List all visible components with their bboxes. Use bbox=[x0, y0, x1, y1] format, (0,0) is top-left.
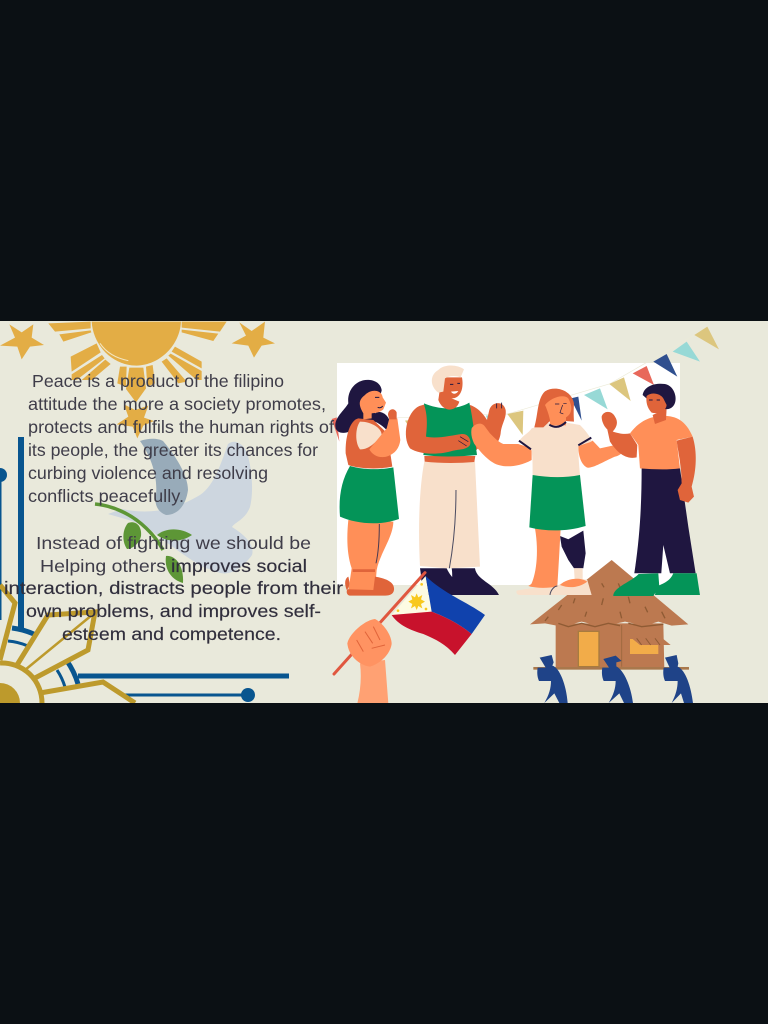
text block: peace paragraph bbox=[28, 371, 334, 506]
illustration: white backdrop bbox=[337, 363, 680, 585]
person: woman with prosthetic leg bbox=[471, 389, 622, 595]
text block: helping others paragraph: Helping others bbox=[40, 556, 166, 576]
illustration: hut carried by men bbox=[530, 560, 693, 703]
icon: gold sun outline bbox=[0, 585, 135, 723]
illustration: fist holding Philippine flag bbox=[334, 573, 485, 703]
bottom letterbox band bbox=[0, 703, 768, 1024]
text block: helping others paragraph: improves social bbox=[171, 556, 307, 576]
text block: helping others paragraph bbox=[4, 533, 343, 644]
text block: peace paragraph: curbing violence and resolving bbox=[28, 463, 268, 483]
icon: sun with stars bbox=[0, 322, 275, 438]
text block: helping others paragraph: own problems, and improves self- bbox=[26, 601, 321, 621]
person: man in green top bbox=[406, 366, 506, 595]
text block: helping others paragraph: Instead of fighting we should be bbox=[36, 533, 311, 553]
text block: helping others paragraph: esteem and competence. bbox=[62, 624, 281, 644]
text block: peace paragraph: conflicts peacefully. bbox=[28, 486, 184, 506]
men carrying bbox=[537, 655, 693, 703]
window bbox=[630, 638, 671, 654]
illustration: bunting bbox=[332, 327, 719, 442]
blue circuit lines bbox=[0, 437, 289, 702]
background panel bbox=[0, 321, 768, 703]
person: woman with dark hair bbox=[335, 380, 400, 596]
icon: dove with olive branch bbox=[95, 439, 253, 583]
text block: helping others paragraph: interaction, distracts people from their bbox=[4, 578, 343, 598]
text block: peace paragraph: its people, the greater its chances for bbox=[28, 440, 318, 460]
text block: peace paragraph: attitude the more a society promotes, bbox=[28, 394, 326, 414]
text block: peace paragraph: Peace is a product of the filipino bbox=[32, 371, 284, 391]
illustration: group of four people bbox=[335, 366, 700, 596]
text block: peace paragraph: protects and fulfils the human rights of bbox=[28, 417, 334, 437]
person: man with curly hair bbox=[602, 384, 700, 596]
door bbox=[578, 631, 599, 667]
roof bbox=[530, 560, 688, 627]
